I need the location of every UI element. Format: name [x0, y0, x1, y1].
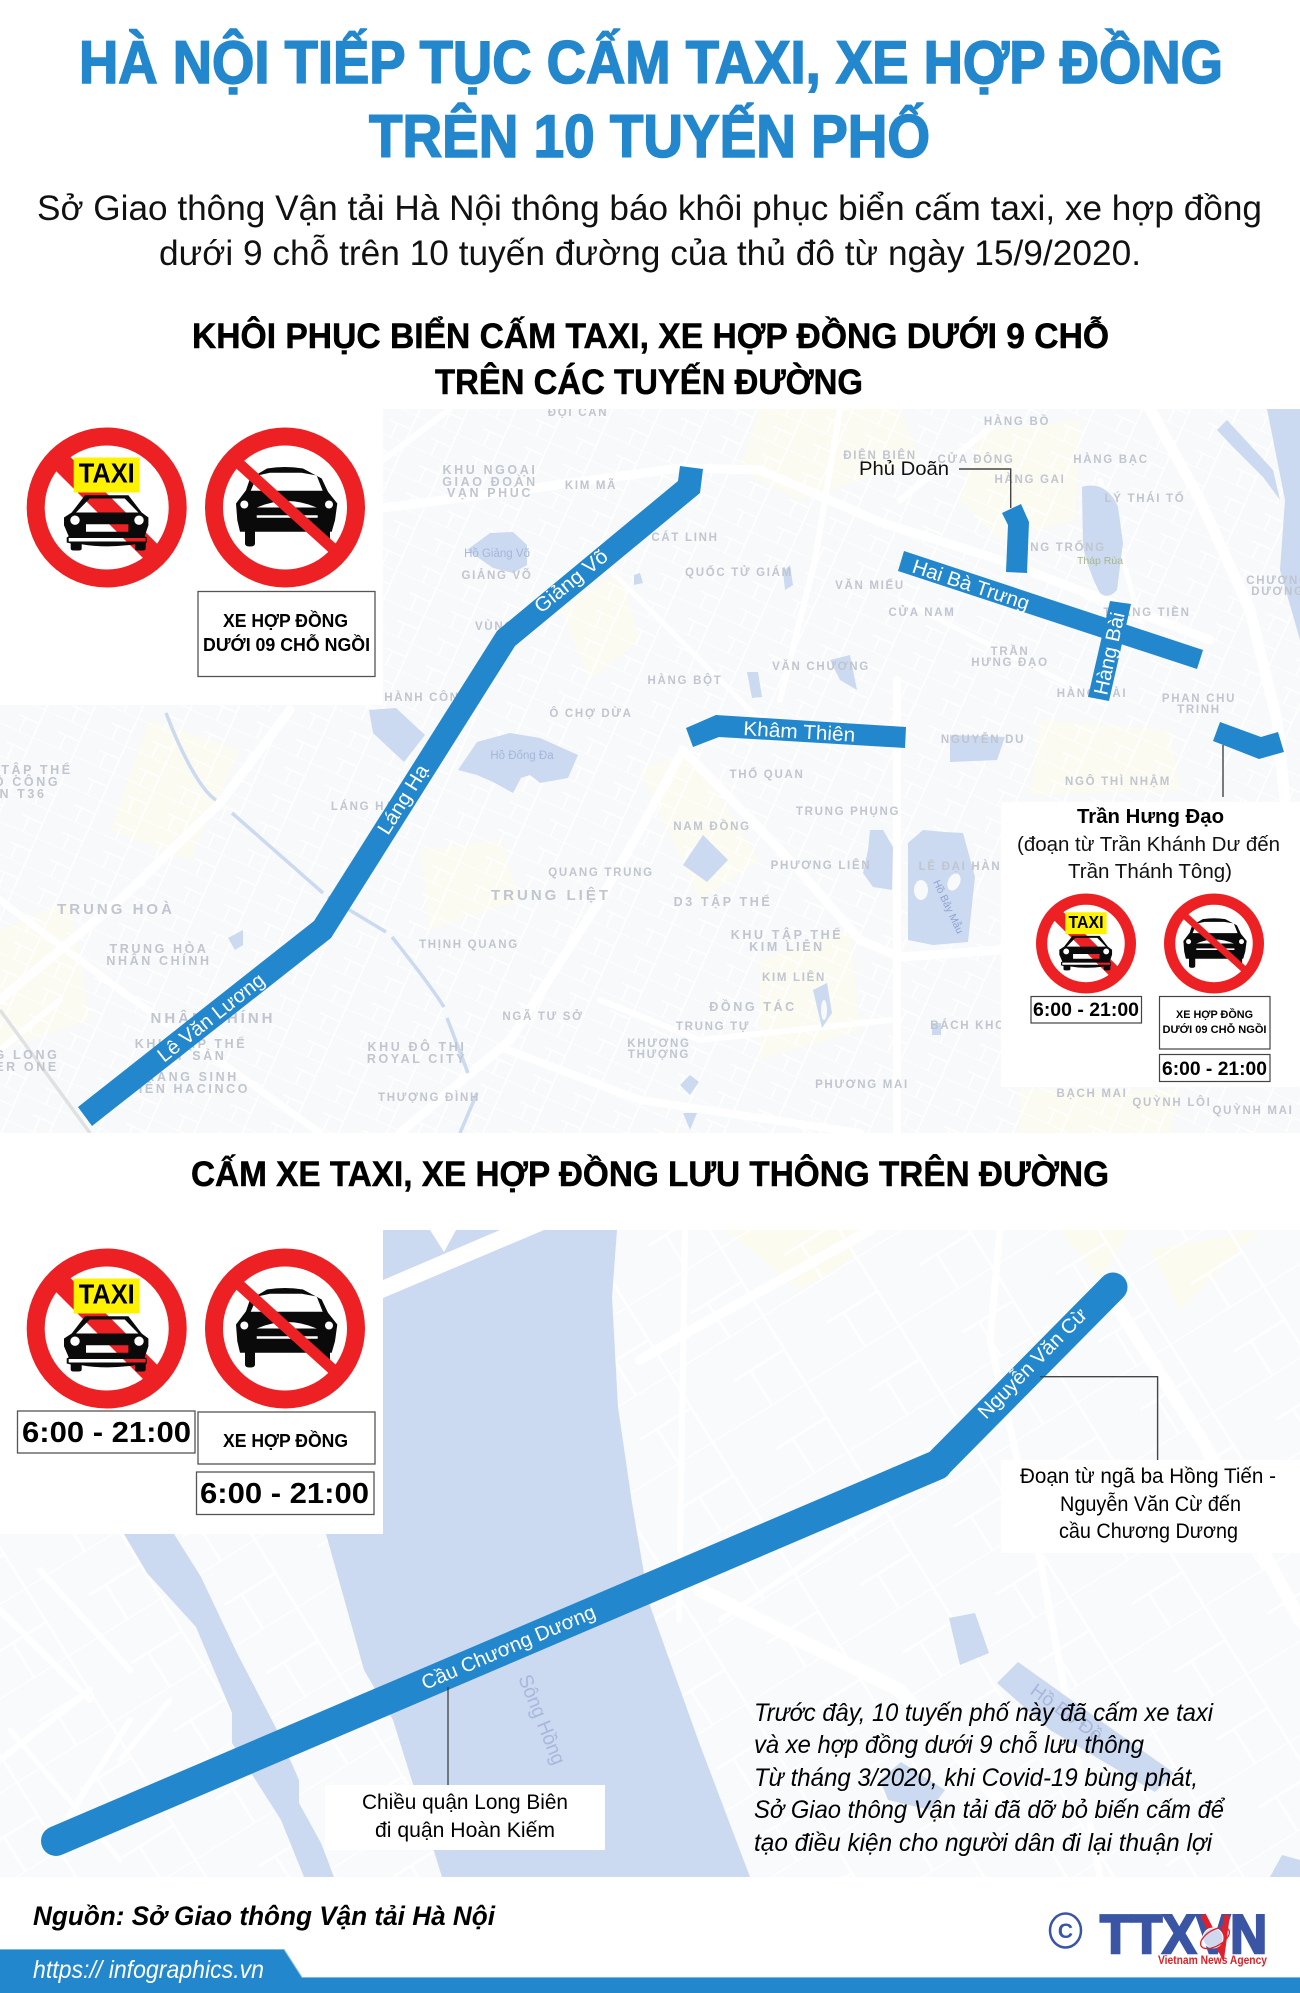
- map: place names: KIM MÃ: [565, 479, 617, 492]
- map: place names: QUỲNH LÔI: [1132, 1096, 1212, 1109]
- time box taxi: 6:00 - 21:00: [22, 1417, 191, 1449]
- icon: no contract car sign: [214, 436, 356, 578]
- map: place names: N T36: [0, 787, 47, 801]
- map: place names: LÝ THÁI TỔ: [1105, 492, 1185, 505]
- road label: Cau Chuong Duong: Cầu Chương Dương: [418, 1601, 599, 1695]
- icon: small no taxi sign: [1042, 899, 1130, 988]
- map: islet: [430, 1230, 456, 1252]
- callout: section from Hong Tien junction: cầu Chương Dương: [1059, 1520, 1238, 1543]
- map: place names: THƯỢNG: [628, 1049, 690, 1061]
- label box contract car: XE HỢP ĐỒNG: [1176, 1008, 1253, 1021]
- map: place names: Hồ Giảng Võ: [464, 548, 530, 560]
- icon: no taxi sign: TAXI: [79, 458, 135, 488]
- label box: contract car under 9 seats: XE HỢP ĐỒNG: [223, 610, 348, 631]
- globe swoosh: [1197, 1915, 1233, 1953]
- callout: section from Hong Tien junction: [1001, 1377, 1300, 1553]
- route: Kham Thien: [686, 715, 906, 748]
- title: TRÊN 10 TUYẾN PHỐ: [369, 103, 930, 170]
- map: place names: HÀNG BẠC: [1073, 453, 1149, 466]
- map: place names: GIAO ĐOÀN: [442, 474, 538, 489]
- section description: (đoạn từ Trần Khánh Dư đến: [1017, 834, 1280, 856]
- map: river name: Sông Hồng: [513, 1672, 569, 1768]
- time box taxi: 6:00 - 21:00: [1033, 1000, 1139, 1021]
- agency wordmark: TTXVN: [1100, 1903, 1267, 1965]
- map: place names: ROYAL CITY: [367, 1052, 467, 1066]
- route segment: Nguyen Van Cu: [937, 1287, 1113, 1465]
- route: Chuong Duong bridge and Nguyen Van Cu: [56, 1287, 1113, 1841]
- map: place names: HÀNG BỒ: [984, 415, 1050, 428]
- map: place names: TẬP THỂ: [1, 762, 73, 777]
- map: Red River: [300, 1230, 750, 1877]
- map: place names: THÀNH CÔNG: [376, 691, 470, 704]
- icon: no taxi sign: [36, 436, 178, 578]
- map: place names: NHÂN CHÍNH: [150, 1009, 276, 1027]
- map: place names: Hồ Bảy Mẫu: [930, 878, 967, 936]
- section description: Trần Thánh Tông): [1068, 861, 1232, 883]
- map: place names: QUỲNH MAI: [1212, 1104, 1294, 1117]
- map: place names: TRUNG LIỆT: [491, 886, 611, 904]
- map: residential patches: [0, 409, 1180, 1133]
- map: place names: VĂN MIẾU: [835, 579, 905, 592]
- text block: background note: Trước đây, 10 tuyến phố này đã cấm xe taxi: [754, 1699, 1214, 1727]
- map: residential patches: [725, 1230, 1260, 1310]
- map: place names: TRINH: [1177, 704, 1221, 716]
- map: place names: QUANG TRUNG: [548, 867, 654, 879]
- callout: direction of travel: Chiều quận Long Biên: [362, 1791, 568, 1814]
- map: place names: TRẦN: [991, 645, 1029, 658]
- map: place names: Tháp Rùa: [1077, 555, 1123, 567]
- map: place names: KIM LIÊN: [762, 971, 826, 984]
- map: place names: NHÂN CHÍNH: [106, 953, 212, 968]
- map: place names: TRANG SINH: [135, 1070, 239, 1084]
- panel: map of inner-city streets: [0, 406, 1300, 1133]
- map: place names: KIM LIÊN: [749, 939, 825, 954]
- callout: direction of travel: [325, 1687, 605, 1850]
- time box contract car: 6:00 - 21:00: [200, 1478, 369, 1510]
- icon: small no taxi sign: TAXI: [1068, 912, 1104, 932]
- map: place names: THỊNH QUANG: [419, 939, 519, 951]
- website url: https:// infographics.vn: [33, 1956, 264, 1984]
- street name: Trần Hưng Đạo: [1077, 806, 1224, 828]
- label box contract car: [198, 1412, 375, 1464]
- map: place names: HÀNG BỘT: [648, 674, 722, 687]
- label: Phu Doan with leader: Phủ Doãn: [859, 458, 949, 480]
- source line: Nguồn: Sở Giao thông Vận tải Hà Nội: [33, 1901, 495, 1931]
- footer band: [0, 1949, 1300, 1993]
- map: place names: HÀNG BÀI: [1057, 687, 1127, 700]
- map: place names: THỔ QUAN: [730, 768, 804, 781]
- map: place names: TÂY SẢN: [154, 1048, 226, 1063]
- road label: Lang Ha: Láng Hạ: [374, 760, 434, 839]
- map: place names: Hồ Đống Đa: [490, 750, 554, 762]
- road label: Giang Vo: Giảng Võ: [530, 545, 613, 618]
- map: place names: HÀNG GAI: [994, 473, 1066, 486]
- intro text: [37, 189, 1262, 273]
- map: place names: D3 TẬP THỂ: [674, 894, 772, 909]
- map: place names: NGÔ THÌ NHẬM: [1065, 775, 1171, 788]
- map: place names: PHƯƠNG MAI: [815, 1079, 909, 1091]
- heading: section 2: CẤM XE TAXI, XE HỢP ĐỒNG LƯU THÔNG TRÊN ĐƯỜNG: [191, 1154, 1109, 1194]
- map: place names: NAM ĐỒNG: [673, 820, 751, 833]
- label box: contract car under 9 seats: DƯỚI 09 CHỖ NGỒI: [203, 634, 370, 655]
- time box taxi: [18, 1411, 195, 1453]
- map: place names: PHƯƠNG LIÊN: [771, 859, 871, 872]
- map: place names: [0, 406, 1300, 1117]
- map: place names: HÀNG TRỐNG: [1010, 540, 1106, 554]
- route: Le Van Luong, Lang Ha, Giang Vo: [78, 466, 703, 1126]
- map: place names: TRUNG PHỤNG: [796, 806, 900, 818]
- map: place names: VIÊN HACINCO: [128, 1081, 250, 1096]
- route: Kham Thien: Khâm Thiên: [743, 718, 856, 747]
- text block: background note: [754, 1699, 1225, 1857]
- map: place names: TRÀNG TIỀN: [1103, 606, 1191, 619]
- text block: background note: Từ tháng 3/2020, khi Covid-19 bùng phát,: [754, 1764, 1198, 1792]
- map: place names: LÁNG HẠ: [331, 800, 395, 813]
- map: place names: HƯNG ĐẠO: [971, 657, 1049, 669]
- route: Hai Ba Trung: [898, 551, 1203, 669]
- copyright mark: C: [1058, 1920, 1073, 1943]
- label box contract car: [1160, 996, 1270, 1049]
- map: place names: ĐỘI CẤN: [548, 406, 608, 419]
- map: place names: KHƯƠNG: [627, 1038, 691, 1050]
- map: place names: ĐỒNG TÁC: [709, 999, 797, 1014]
- map: place names: TRUNG HOÀ: [57, 901, 175, 918]
- map: place names: VẠN PHÚC: [447, 485, 533, 500]
- map: place names: CỬA ĐÔNG: [937, 453, 1015, 466]
- map: To Lich river: [166, 713, 477, 1133]
- map: side channel: [124, 1534, 334, 1877]
- route: Hai Ba Trung: Hai Bà Trưng: [909, 556, 1032, 615]
- map: place names: THƯỢNG ĐÌNH: [378, 1091, 480, 1104]
- route: Tran Hung Dao with leader: [1213, 722, 1284, 797]
- map: place names: KHU TẬP THỂ: [135, 1036, 247, 1051]
- route: Phu Doan: [1002, 504, 1029, 573]
- icon: small no contract car sign: [1170, 899, 1258, 988]
- section description: [1017, 834, 1280, 883]
- road label: Le Van Luong: Lê Văn Lương: [153, 969, 269, 1067]
- map: place names: NGUYỄN DU: [941, 733, 1025, 746]
- copyright mark: [1050, 1914, 1081, 1948]
- map: white roads: [781, 1230, 860, 1281]
- map: place names: PHAN CHU: [1162, 693, 1236, 705]
- time box contract car: 6:00 - 21:00: [1162, 1059, 1267, 1080]
- route: Hang Bai: Hàng Bài: [1090, 610, 1130, 697]
- map: bridge ramp road across river: [383, 1230, 544, 1298]
- text block: background note: Sở Giao thông Vận tải đã dỡ bỏ biến cấm để: [754, 1796, 1225, 1824]
- intro text: Sở Giao thông Vận tải Hà Nội thông báo khôi phục biển cấm taxi, xe hợp đồng: [37, 189, 1262, 228]
- label: Phu Doan with leader: [859, 458, 1011, 508]
- heading: section 1: KHÔI PHỤC BIỂN CẤM TAXI, XE HỢP ĐỒNG DƯỚI 9 CHỖ: [192, 316, 1109, 356]
- map: lake name: Hồ Bồ Đề: [1026, 1680, 1106, 1746]
- map: place names: BÁCH KHOA: [930, 1019, 1016, 1032]
- map: place names: QUỐC TỬ GIÁM: [685, 565, 793, 579]
- map: place names: VÙNG: [475, 620, 515, 633]
- intro text: dưới 9 chỗ trên 10 tuyến đường của thủ đô từ ngày 15/9/2020.: [159, 234, 1141, 273]
- panel: legend signs top left: [0, 409, 383, 705]
- heading: section 1: [192, 316, 1109, 402]
- map: place names: KHU ĐÔ THỊ: [368, 1039, 466, 1054]
- map: place names: CỬA NAM: [888, 606, 956, 619]
- map: place names: LÊ ĐẠI HÀNH: [919, 860, 1011, 873]
- label box contract car: DƯỚI 09 CHỖ NGỒI: [1162, 1023, 1266, 1036]
- icon: no contract car sign: [214, 1258, 356, 1400]
- text block: background note: tạo điều kiện cho người dân đi lại thuận lợi: [754, 1829, 1213, 1857]
- agency name: Vietnam News Agency: [1158, 1955, 1268, 1967]
- heading: section 1: TRÊN CÁC TUYẾN ĐƯỜNG: [435, 362, 863, 402]
- panel: Tran Hung Dao details: [1001, 802, 1300, 1087]
- title: [79, 29, 1223, 170]
- map: place names: BẠCH MAI: [1056, 1088, 1128, 1100]
- callout: direction of travel: đi quận Hoàn Kiếm: [375, 1819, 555, 1842]
- map: place names: TRUNG HÒA: [109, 941, 209, 956]
- map: place names: NGÃ TƯ SỞ: [502, 1010, 584, 1023]
- map: lake islands: [821, 871, 963, 1020]
- road label: Nguyen Van Cu: Nguyễn Văn Cừ: [973, 1303, 1092, 1424]
- map: place names: CÁT LINH: [651, 531, 719, 544]
- text block: background note: và xe hợp đồng dưới 9 chỗ lưu thông: [754, 1730, 1144, 1759]
- map: place names: GIẢNG VÕ: [461, 569, 533, 582]
- map: lakes: [228, 409, 1300, 1130]
- map: place names: TRUNG TỰ: [676, 1021, 750, 1033]
- icon: no taxi sign: [36, 1258, 178, 1400]
- map: main roads: [0, 409, 994, 1050]
- map: place names: Ô CHỢ DỪA: [549, 707, 633, 720]
- panel: map of Chuong Duong bridge: [0, 1230, 1300, 1877]
- map: lakes: [880, 1613, 1300, 1877]
- map: place names: VĂN CHƯƠNG: [772, 660, 870, 673]
- map: place names: ĐIỆN BIÊN: [843, 449, 917, 462]
- panel: legend signs second section: [0, 1230, 383, 1534]
- callout: section from Hong Tien junction: Đoạn từ ngã ba Hồng Tiến -: [1020, 1465, 1276, 1488]
- icon: no taxi sign: TAXI: [79, 1278, 135, 1310]
- map: elevated rail line: [0, 1010, 90, 1133]
- callout: section from Hong Tien junction: Nguyễn Văn Cừ đến: [1060, 1493, 1241, 1516]
- label box: contract car under 9 seats: [198, 592, 375, 676]
- logo: TTXVN: [1050, 1903, 1268, 1967]
- map: place names: KHU TẬP THỂ: [731, 927, 843, 942]
- time box contract car: [196, 1472, 374, 1514]
- label box contract car: XE HỢP ĐỒNG: [223, 1430, 348, 1451]
- map: place names: KHU NGOẠI: [443, 463, 537, 477]
